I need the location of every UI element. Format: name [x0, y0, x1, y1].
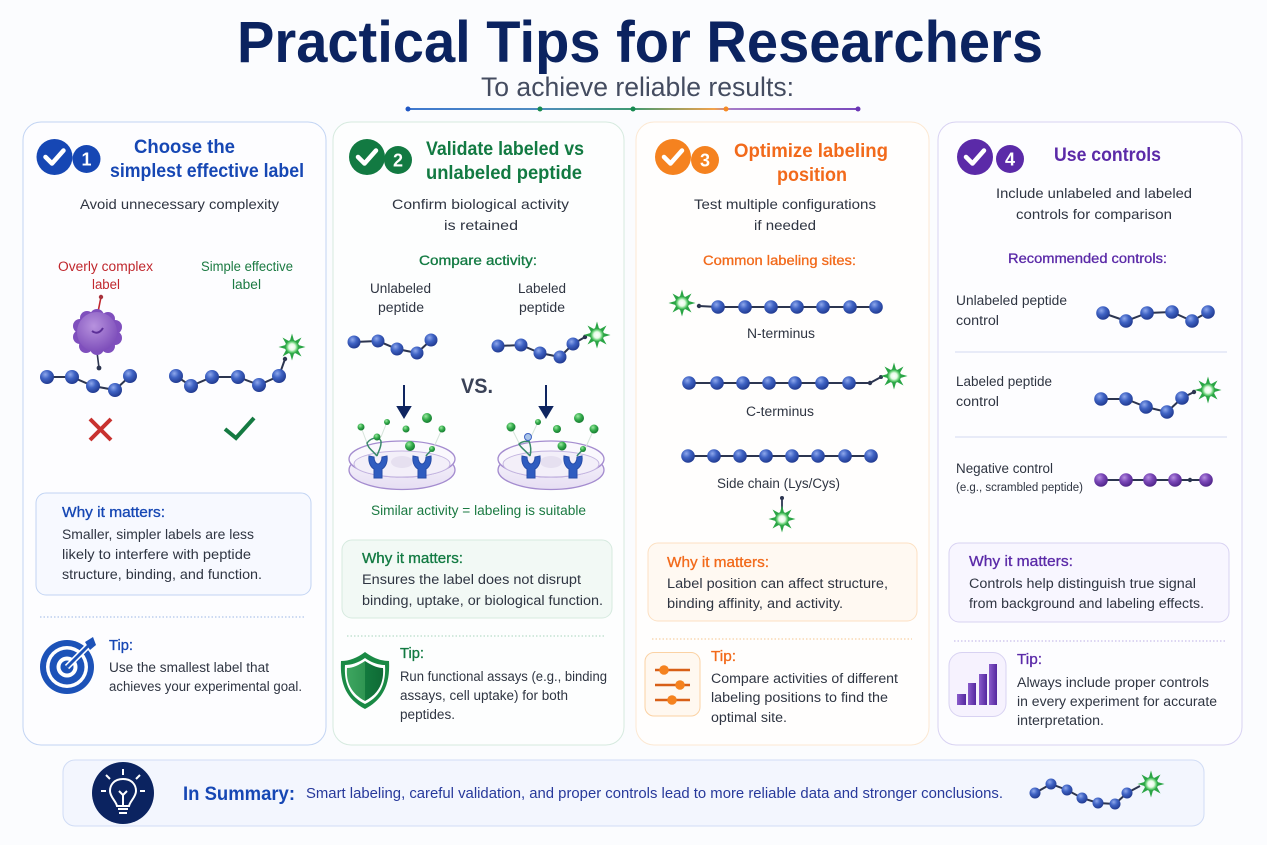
- tip text: Tip:: [109, 638, 133, 654]
- callout: why it matters: Ensures the label does not disrupt: [362, 572, 581, 587]
- illustration: labeled peptide: [1030, 770, 1164, 810]
- callout: why it matters: structure, binding, and function.: [62, 566, 262, 582]
- panel: tip 3 optimize labeling position: [636, 122, 929, 745]
- description: is retained: [444, 217, 518, 233]
- callout: why it matters: binding, uptake, or biological function.: [362, 593, 603, 608]
- label: labeled control: control: [956, 394, 999, 409]
- icon: check badge 2: [349, 139, 412, 175]
- label: unlabeled control: control: [956, 313, 999, 328]
- icon: check badge 4: 4: [1005, 150, 1015, 170]
- subheading: compare activity: Compare activity:: [419, 253, 537, 268]
- callout: why it matters: [648, 543, 917, 621]
- heading: [110, 137, 304, 182]
- illustration: unlabeled control peptide: [1096, 305, 1215, 328]
- label: negative control: (e.g., scrambled peptide): [956, 482, 1083, 494]
- label: simple effective: label: [232, 277, 261, 292]
- icon: sliders: [645, 652, 700, 716]
- tip text: [1017, 652, 1217, 728]
- icon: check badge 3: [655, 139, 719, 175]
- tip text: Tip:: [400, 646, 424, 662]
- result caption: Similar activity = labeling is suitable: [371, 503, 586, 518]
- arrow: left down: [398, 385, 410, 417]
- tip text: labeling positions to find the: [711, 690, 888, 705]
- summary text: Smart labeling, careful validation, and proper controls lead to more reliable data and stronger conclusions.: [306, 786, 1003, 802]
- illustration: labeled peptide: [492, 322, 610, 364]
- tip text: [400, 646, 607, 722]
- icon: light bulb: [92, 762, 154, 824]
- description: Test multiple configurations: [694, 196, 876, 212]
- description: controls for comparison: [1016, 206, 1172, 222]
- subheading: common labeling sites: Common labeling sites:: [703, 253, 856, 268]
- icon: shield: [341, 652, 389, 709]
- callout: why it matters: binding affinity, and activity.: [667, 596, 843, 611]
- icon: check badge 1: 1: [81, 150, 92, 170]
- label: unlabeled control: [956, 293, 1067, 328]
- label: side chain: Side chain (Lys/Cys): [717, 476, 840, 491]
- tip text: Always include proper controls: [1017, 675, 1209, 690]
- tip text: Tip:: [1017, 652, 1042, 668]
- callout: why it matters: [342, 540, 612, 618]
- label: unlabeled control: Unlabeled peptide: [956, 293, 1067, 308]
- callout: why it matters: Smaller, simpler labels are less: [62, 526, 254, 542]
- panel: tip 4 use controls: [938, 122, 1242, 745]
- tip text: achieves your experimental goal.: [109, 679, 302, 694]
- callout: why it matters: Why it matters:: [667, 555, 769, 571]
- heading: unlabeled peptide: [426, 163, 582, 184]
- icon: check badge 2: 2: [393, 150, 403, 170]
- title divider with colored dots: [406, 106, 860, 112]
- heading: position: [777, 165, 847, 186]
- callout: why it matters: [36, 493, 311, 595]
- description: Include unlabeled and labeled: [996, 185, 1192, 201]
- tip text: interpretation.: [1017, 713, 1104, 728]
- tip text: Run functional assays (e.g., binding: [400, 669, 607, 684]
- panel: summary banner: [63, 760, 1204, 826]
- tip text: in every experiment for accurate: [1017, 694, 1217, 709]
- label: overly complex: Overly complex: [58, 259, 153, 274]
- heading: simplest effective label: [110, 161, 304, 182]
- tip text: assays, cell uptake) for both: [400, 688, 568, 703]
- description: [392, 196, 569, 233]
- callout: why it matters: Controls help distinguish true signal: [969, 576, 1196, 591]
- callout: why it matters: likely to interfere with peptide: [62, 546, 251, 562]
- vs label: VS.: [461, 375, 493, 398]
- icon: check badge 1: [36, 139, 100, 175]
- arrow: right down: [540, 385, 552, 417]
- label: labeled control: [956, 374, 1052, 409]
- icon: check badge 3: 3: [700, 150, 710, 170]
- heading: Choose the: [134, 137, 235, 158]
- subtitle: To achieve reliable results:: [481, 72, 794, 102]
- icon: target with arrow: [40, 637, 96, 694]
- illustration: negative control peptide: [1094, 473, 1213, 487]
- callout: why it matters: Why it matters:: [969, 554, 1073, 570]
- icon: green check: [225, 418, 254, 438]
- tip text: peptides.: [400, 707, 455, 722]
- description: Confirm biological activity: [392, 196, 569, 212]
- illustration: c-terminus peptide: [682, 362, 908, 390]
- label: labeled peptide: [518, 281, 566, 315]
- tip text: Compare activities of different: [711, 671, 898, 686]
- label: overly complex: label: [92, 277, 120, 292]
- label: unlabeled peptide: peptide: [378, 300, 424, 315]
- callout: why it matters: Label position can affect structure,: [667, 576, 888, 591]
- label: simple effective: [201, 259, 293, 292]
- illustration: labeled control peptide: [1094, 376, 1222, 419]
- callout: why it matters: Why it matters:: [62, 505, 165, 521]
- panel: tip 2 validate labeled vs unlabeled: [333, 122, 624, 745]
- summary heading: In Summary:: [183, 784, 295, 805]
- subheading: recommended controls: Recommended controls:: [1008, 251, 1167, 266]
- icon: bar chart: [949, 652, 1006, 716]
- description: [694, 196, 876, 233]
- panel: tip 1 choose the simplest label: [23, 122, 326, 745]
- tip text: [109, 638, 302, 694]
- tip text: Use the smallest label that: [109, 660, 269, 675]
- illustration: side chain peptide: [681, 449, 878, 463]
- callout: why it matters: [949, 543, 1229, 622]
- label: negative control: Negative control: [956, 461, 1053, 476]
- label: n-terminus: N-terminus: [747, 326, 815, 341]
- icon: red cross: [90, 419, 111, 440]
- heading: Use controls: [1054, 145, 1161, 166]
- illustration: peptide with small label: [169, 334, 306, 393]
- description: Avoid unnecessary complexity: [80, 196, 279, 212]
- illustration: petri dish left: [349, 413, 455, 490]
- heading: [426, 139, 584, 184]
- tip text: [711, 649, 898, 725]
- label: negative control: [956, 461, 1083, 494]
- heading: Validate labeled vs: [426, 139, 584, 160]
- illustration: unlabeled peptide: [348, 334, 438, 360]
- label: overly complex: [58, 259, 153, 292]
- heading: Optimize labeling: [734, 141, 888, 162]
- illustration: petri dish right: [498, 413, 604, 490]
- callout: why it matters: from background and labeling effects.: [969, 596, 1204, 611]
- icon: side chain label: [768, 496, 796, 532]
- label: unlabeled peptide: Unlabeled: [370, 281, 431, 296]
- tip text: Tip:: [711, 649, 736, 665]
- description: if needed: [754, 217, 816, 233]
- label: simple effective: Simple effective: [201, 259, 293, 274]
- title: Practical Tips for Researchers: [237, 10, 1043, 75]
- heading: [734, 141, 888, 186]
- label: c-terminus: C-terminus: [746, 404, 814, 419]
- label: labeled peptide: peptide: [519, 300, 565, 315]
- illustration: peptide with bulky label: [40, 295, 137, 397]
- callout: why it matters: Why it matters:: [362, 551, 463, 567]
- icon: check badge 4: [957, 139, 1024, 175]
- label: labeled peptide: Labeled: [518, 281, 566, 296]
- description: [996, 185, 1192, 222]
- tip text: optimal site.: [711, 710, 787, 725]
- label: labeled control: Labeled peptide: [956, 374, 1052, 389]
- illustration: n-terminus peptide: [668, 290, 883, 316]
- label: unlabeled peptide: [370, 281, 431, 315]
